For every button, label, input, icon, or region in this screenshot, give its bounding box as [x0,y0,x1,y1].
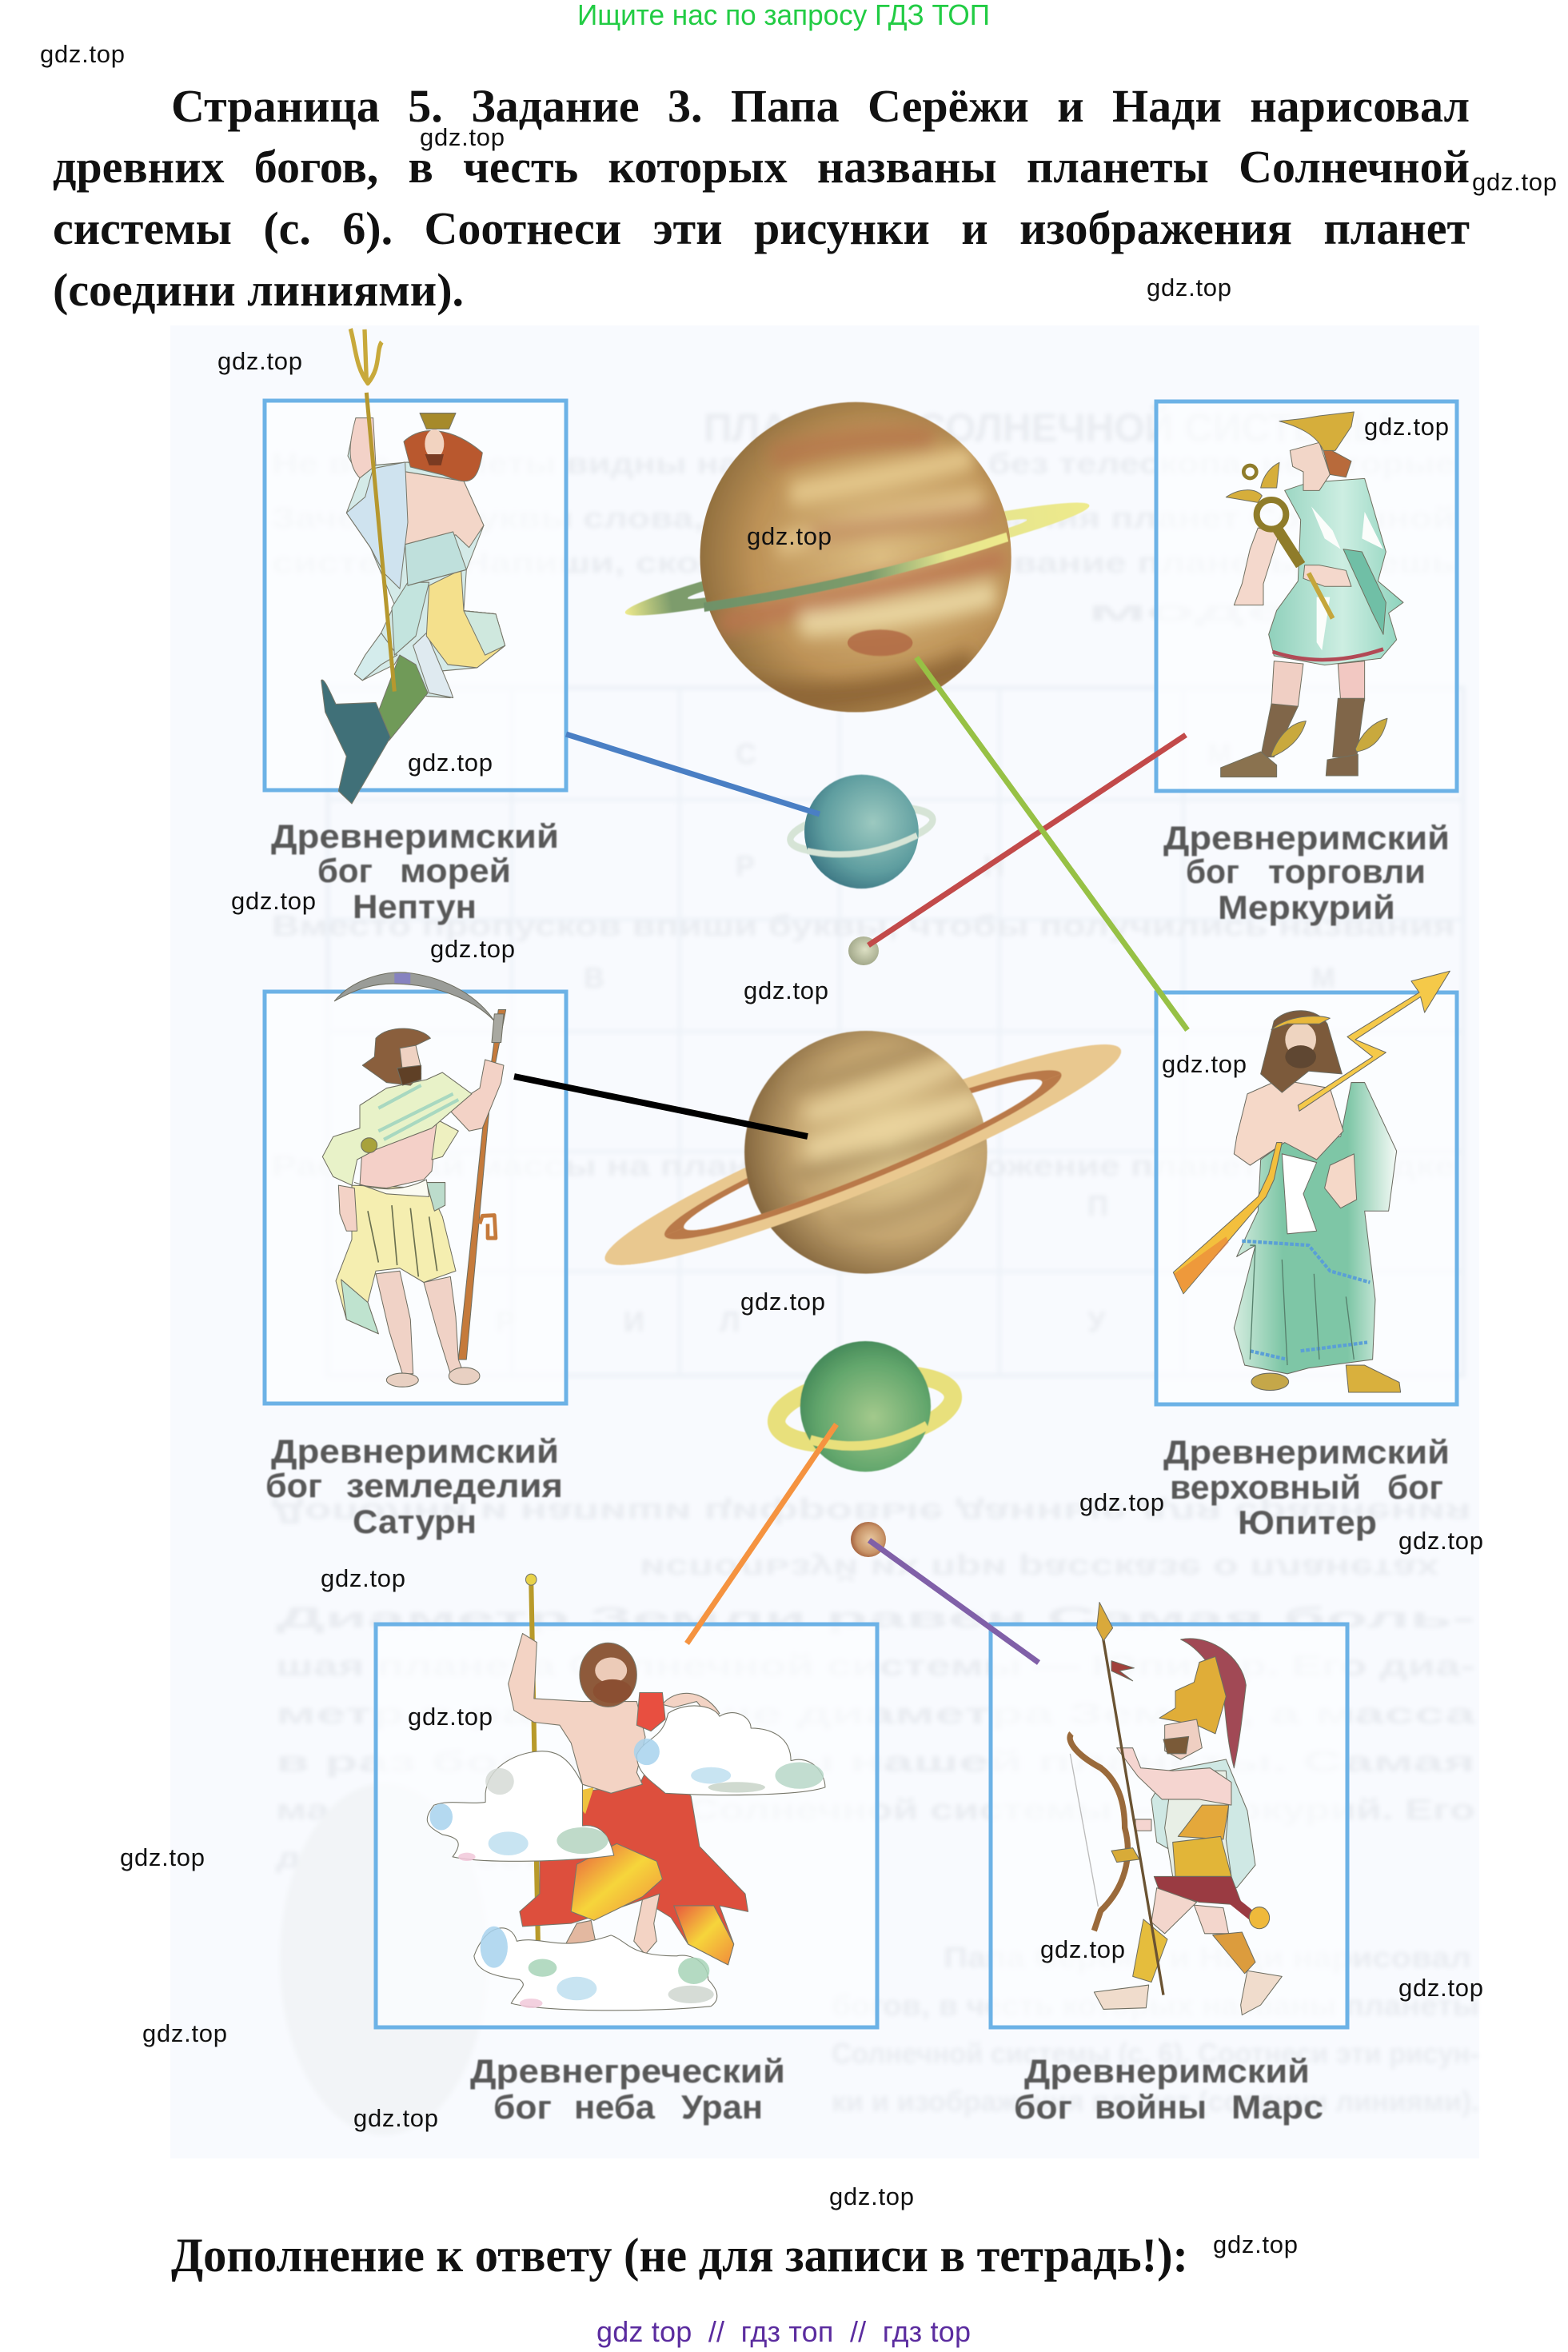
watermarks: gdz.top [1472,168,1557,196]
frame: Mars [991,1624,1347,2027]
faint bleed-through of the reverse page: Папа Серёжи и Нади нарисовал [944,1941,1471,1974]
watermarks: gdz.top [1147,274,1231,301]
figure: Mars [1070,1603,1282,2015]
caption: Mercury [1163,819,1450,926]
caption: Saturn [265,1432,563,1540]
watermarks: gdz.top [420,123,505,151]
figure: Jupiter [1173,971,1450,1392]
caption: Neptune [271,817,559,925]
answer line: Neptune to planet [566,734,820,814]
caption: Mercury: Меркурий [1218,888,1395,926]
caption: Mars: бог [1014,2088,1072,2126]
footer heading: addition to the answer: Дополнение к ответу (не для записи в тетрадь!): [171,2229,1188,2282]
figure: Mercury [1221,412,1403,777]
faint bleed-through of the reverse page: Солнечной системы (с. 6). Соотнеси эти рисун- [832,2037,1479,2070]
task heading: системы (с. 6). Соотнеси эти рисунки и изображения планет [53,202,1470,254]
caption: Mars [1014,2052,1323,2126]
faint bleed-through of the reverse page: У [928,1189,946,1222]
caption: Uranus: бог [493,2088,552,2126]
planet: green ringed planet [772,1341,958,1471]
planet: Jupiter with ring [622,402,1092,713]
caption: Neptune: бог [317,852,373,889]
watermarks: gdz.top [1040,1935,1125,1963]
faint bleed-through of the reverse page: М [1311,961,1335,994]
caption: Jupiter: бог [1387,1468,1443,1506]
faint bleed-through of the reverse page: Рассчитай массы на планетах. Расположение планет в порядке [272,1149,1455,1182]
caption: Mercury: торговли [1268,853,1426,890]
caption: Mars: Древнеримский [1024,2052,1310,2090]
caption: Uranus: неба [574,2088,656,2126]
faint bleed-through of the reverse page: С [736,737,756,770]
faint bleed-through of the reverse page: метр в раз больше диаметра Земли, а масса [276,1697,1477,1730]
watermarks: gdz.top [1162,1050,1247,1078]
faint bleed-through of the reverse page: ПЛАНЕТЫ СОЛНЕЧНОЙ СИСТЕМЫ [704,405,1391,450]
caption: Mars: Марс [1231,2088,1323,2126]
caption: Jupiter: Древнеримский [1163,1433,1450,1471]
caption: Saturn: земледелия [346,1467,563,1504]
figure: Uranus [427,1574,825,2011]
caption: Saturn: бог [265,1467,322,1504]
caption: Neptune: морей [400,852,511,889]
caption: Jupiter: верховный [1170,1468,1361,1506]
caption: Uranus: Древнегреческий [470,2052,785,2090]
faint bleed-through of the reverse page: М [1207,737,1231,770]
task heading: Страница 5. Задание 3. Папа Серёжи и Нади нарисовал [171,80,1470,132]
faint bleed-through of the reverse page: Н [983,849,1004,882]
answer line: Jupiter to planet [916,657,1187,1030]
frame: Jupiter [1156,992,1457,1404]
watermarks: gdz.top [829,2182,914,2210]
faint bleed-through of the reverse page: Диаметр Земли равен Самая боль- [276,1601,1475,1634]
planet: Mars [851,1522,886,1557]
watermarks: gdz.top [408,1703,493,1731]
watermarks: gdz.top [40,40,125,68]
faint bleed-through of the reverse page [272,405,1479,2135]
faint bleed-through of the reverse page: П [1087,1189,1108,1222]
faint bleed-through of the reverse page: Не все планеты видны на ночном небе без телескопа, некоторые [272,447,1455,480]
faint bleed-through of the reverse page: Дополни и напиши цифровые данные для сравнения [272,1497,1471,1530]
caption: Mars: войны [1095,2088,1207,2126]
watermarks: gdz.top [321,1564,405,1592]
faint bleed-through of the reverse page: ки и изображения планет (соедини линиями). [832,2085,1479,2118]
faint bleed-through of the reverse page: Р [496,1305,515,1338]
watermarks: gdz.top [1364,413,1449,441]
watermarks: gdz.top [408,749,493,777]
faint bleed-through of the reverse page: модели [1087,594,1391,627]
caption: Neptune: Нептун [353,888,477,925]
caption: Jupiter [1163,1433,1450,1541]
scanned textbook page background [170,325,1479,2158]
frame: Uranus [376,1624,877,2027]
planet: Mercury [848,936,879,965]
caption: Saturn: Древнеримский [271,1432,559,1470]
watermarks: gdz.top [740,1288,825,1316]
watermarks: gdz.top [353,2104,438,2132]
watermarks: gdz.top [1398,1974,1483,2002]
watermarks: gdz.top [1213,2230,1298,2258]
caption: Uranus: Уран [681,2088,763,2126]
caption: Neptune: Древнеримский [271,817,559,855]
caption: Mercury: бог [1186,853,1239,890]
faint bleed-through of the reverse page: Р [736,849,755,882]
watermarks: gdz.top [744,976,828,1004]
faint bleed-through of the reverse page: Вместо пропусков впиши буквы, чтобы получились названия [272,909,1455,942]
faint bleed-through of the reverse page: И [624,1305,644,1338]
faint bleed-through of the reverse page: В [584,961,604,994]
task heading: древних богов, в честь которых названы планеты Солнечной [53,141,1470,193]
faint bleed-through of the reverse page: богов, в честь которых названы планеты [832,1989,1479,2022]
faint bleed-through of the reverse page: Зачеркни буквы слова, связанные названия планет Солнечной [272,501,1455,534]
frame: Mercury [1156,401,1457,791]
task heading [53,80,1470,316]
planet: Saturn with rings [604,1030,1122,1275]
faint bleed-through of the reverse page: маленькая планета Солнечной системы — Меркурий. Его [276,1793,1475,1826]
watermarks: gdz.top [430,935,515,963]
caption: Saturn: Сатурн [353,1503,477,1540]
frame: Neptune [265,401,566,790]
caption: Uranus [470,2052,785,2126]
faint bleed-through of the reverse page: шая планета Солнечной системы — Юпитер. Его диа- [276,1649,1475,1682]
answer line: Uranus to planet [687,1424,836,1643]
caption: Mercury: Древнеримский [1163,819,1450,857]
answer line: Mercury to planet [868,735,1186,945]
task heading: (соедини линиями). [53,264,464,316]
planet: Uranus with ring [788,775,935,888]
footer links: gdz top // гдз топ // гдз top [596,2315,971,2348]
caption: Jupiter: Юпитер [1238,1503,1377,1541]
figure: Neptune [321,329,505,804]
watermarks: gdz.top [1079,1488,1164,1516]
watermarks: gdz.top [142,2019,227,2047]
faint bleed-through of the reverse page: Л [720,1305,740,1338]
watermarks: gdz.top [217,347,302,375]
faint bleed-through of the reverse page: в раз больше массы нашей планеты. Самая [276,1745,1475,1778]
faint bleed-through of the reverse page: диаметр составляет [276,1841,676,1874]
figure: Saturn [322,972,506,1387]
faint bleed-through of the reverse page: У [1087,1305,1106,1338]
watermarks: gdz.top [231,887,316,915]
answer line: Saturn to planet [514,1076,808,1136]
faint bleed-through of the reverse page: используй их при рассказе о планетах [640,1553,1439,1586]
faint bleed-through of the reverse page: системы. Напиши, сколько каждое название планеты знаешь [272,546,1455,579]
watermarks: gdz.top [747,522,832,550]
watermarks: gdz.top [120,1843,205,1871]
watermarks: gdz.top [1398,1527,1483,1555]
answer line: Mars to planet [869,1540,1039,1663]
frame: Saturn [265,992,566,1404]
